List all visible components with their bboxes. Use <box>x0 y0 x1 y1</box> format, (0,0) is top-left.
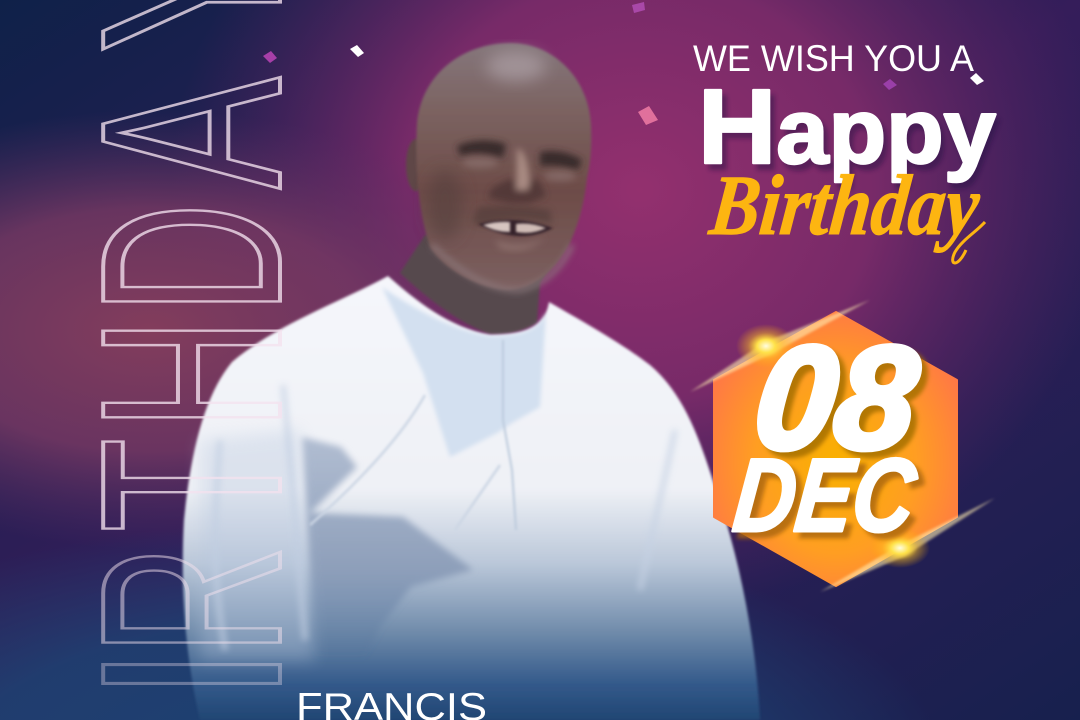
mouth <box>478 220 553 250</box>
light streak bottom <box>820 498 995 592</box>
vertical outlined word BIRTHDAY: T <box>48 438 335 532</box>
diagonal crease <box>310 395 500 530</box>
left cheek shadow <box>427 170 463 240</box>
vertical outlined word BIRTHDAY: D <box>48 203 335 314</box>
chin highlight <box>432 245 572 290</box>
person <box>183 43 760 720</box>
y tail swash <box>953 222 985 263</box>
moustache shadow <box>472 206 552 226</box>
heading: we wish you a: WE WISH YOU A <box>693 38 974 79</box>
vertical outlined word BIRTHDAY: H <box>48 318 335 430</box>
brows and eyes <box>457 140 582 170</box>
sleeve folds <box>215 385 675 650</box>
vertical outlined word BIRTHDAY: I <box>48 646 335 702</box>
light streak top <box>690 300 870 392</box>
white shirt <box>183 276 760 720</box>
collar shadow <box>382 287 546 457</box>
heading: birthday script: Birthday <box>705 157 985 253</box>
head <box>416 43 591 290</box>
placket line <box>503 340 516 530</box>
confetti <box>263 2 984 125</box>
month: DEC <box>729 438 922 554</box>
vertical outlined word BIRTHDAY: R <box>48 545 335 655</box>
day number: 08 <box>748 316 925 480</box>
hexagon <box>714 312 957 586</box>
sleeve tint <box>200 430 315 660</box>
ear <box>406 139 426 191</box>
eye highlights <box>462 158 576 181</box>
month: DEC <box>735 444 928 560</box>
body shadow <box>302 437 473 690</box>
vertical outlined word BIRTHDAY: A <box>48 76 335 189</box>
heading: happy: Happy <box>703 74 999 192</box>
date badge <box>690 300 995 592</box>
day number: 08 <box>754 322 931 486</box>
vertical outlined word BIRTHDAY <box>48 0 335 720</box>
neck <box>400 235 560 334</box>
nose <box>488 148 546 203</box>
scalp highlight <box>486 51 546 81</box>
heading: happy: Happy <box>698 68 996 186</box>
